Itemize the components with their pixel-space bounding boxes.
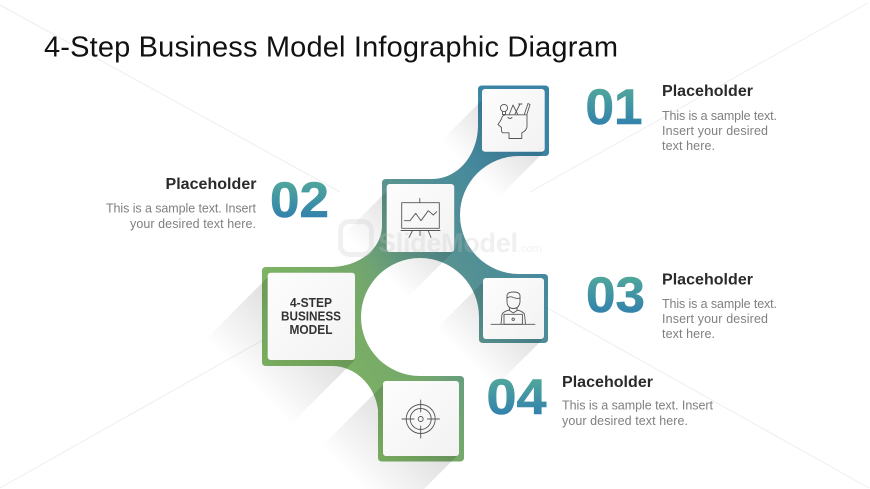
card: step 1 xyxy=(482,89,545,152)
step 02 text xyxy=(106,172,329,231)
step 02 text: This is a sample text. Insert xyxy=(106,202,257,216)
step 04 text: your desired text here. xyxy=(562,414,688,428)
step 04 text: 04 xyxy=(486,369,547,425)
step 03 text: Placeholder xyxy=(662,272,753,288)
card: central label: BUSINESS xyxy=(281,310,341,324)
card: step 4 xyxy=(383,381,459,456)
watermark: .com xyxy=(518,243,542,255)
step 04 text xyxy=(486,369,714,428)
card: central label: 4-STEP xyxy=(290,296,332,310)
step 03 text: Insert your desired xyxy=(662,312,768,326)
step 02 text: Placeholder xyxy=(166,176,256,193)
diagram: connected frame xyxy=(262,86,549,462)
title: 4-Step Business Model Infographic Diagram xyxy=(44,32,618,64)
long shadows xyxy=(205,94,544,489)
step 04 text: Placeholder xyxy=(562,374,653,391)
card: step 3 xyxy=(483,278,544,339)
icon: presentation board xyxy=(401,198,440,238)
step 03 text: text here. xyxy=(662,327,715,341)
icon: target xyxy=(402,400,440,438)
step 02 text: your desired text here. xyxy=(130,217,256,231)
step 01 text: Insert your desired xyxy=(662,124,768,138)
icon: person at laptop xyxy=(491,292,535,324)
card: central label: MODEL xyxy=(290,323,333,337)
step 01 text: This is a sample text. xyxy=(662,109,777,123)
watermark xyxy=(340,222,542,258)
step 03 text xyxy=(586,267,777,341)
step 01 text: text here. xyxy=(662,139,715,153)
step 01 text: 01 xyxy=(586,79,642,135)
step 01 text: Placeholder xyxy=(662,83,753,100)
card: step 2 xyxy=(387,184,454,252)
step 04 text: This is a sample text. Insert xyxy=(562,398,714,412)
step 02 text: 02 xyxy=(270,172,329,228)
watermark: SlideModel xyxy=(378,228,518,258)
card: central label xyxy=(268,273,355,360)
icon: head with ideas xyxy=(498,104,530,138)
step 01 text xyxy=(586,79,777,153)
step 03 text: 03 xyxy=(586,267,645,323)
step 03 text: This is a sample text. xyxy=(662,297,777,311)
